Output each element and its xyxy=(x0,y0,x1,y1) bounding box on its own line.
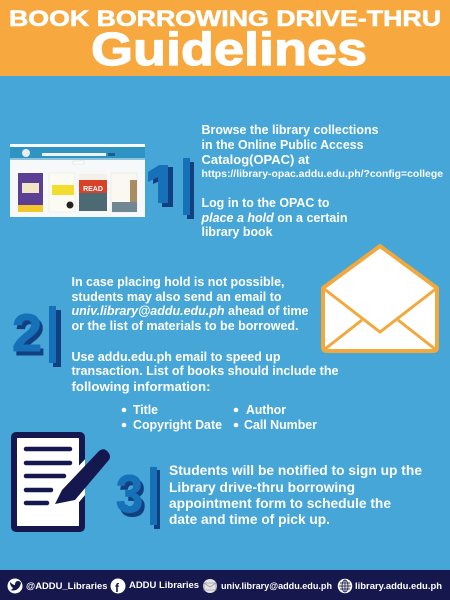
icon: facebook: f xyxy=(115,581,120,595)
step 2 text: univ.library@addu.edu.ph ahead of time xyxy=(72,304,309,318)
information list: Title xyxy=(133,403,158,417)
information list: Copyright Date xyxy=(133,418,222,432)
step 1 text: https://library-opac.addu.edu.ph/?config=college xyxy=(202,168,443,180)
icon: email xyxy=(203,579,217,593)
icon: globe xyxy=(338,580,352,592)
number 1 with bars xyxy=(148,158,194,219)
number 3 with bars: 3 xyxy=(116,465,143,524)
number 2 with bars: 2 xyxy=(12,304,42,363)
number 2 with bars xyxy=(12,304,61,367)
footer: website: library.addu.edu.ph xyxy=(355,581,442,591)
OPAC website screenshot xyxy=(10,144,145,217)
footer: email address: univ.library@addu.edu.ph xyxy=(221,581,332,591)
step 2 text xyxy=(72,275,339,394)
step 1 text xyxy=(200,123,443,239)
screenshot book title: READ xyxy=(83,186,103,193)
step 1 text: Catalog(OPAC) at xyxy=(202,153,310,167)
step 3 text: appointment form to schedule the xyxy=(169,496,391,511)
title: book borrowing drive-thru: BOOK BORROWING DRIVE-THRU xyxy=(9,6,441,31)
footer: facebook page: ADDU Libraries xyxy=(129,580,199,590)
step 3 text: date and time of pick up. xyxy=(169,512,330,527)
step 3 text xyxy=(169,463,422,527)
icon: twitter xyxy=(8,578,22,594)
step 1 text: Log in to the OPAC to xyxy=(202,196,330,210)
step 1 text: in the Online Public Access xyxy=(202,138,364,152)
step 2 text: In case placing hold is not possible, xyxy=(72,275,284,289)
step 3 text: Library drive-thru borrowing xyxy=(169,480,355,495)
step 2 text: Use addu.edu.ph email to speed up xyxy=(72,350,281,364)
panel: step 1 xyxy=(10,123,443,239)
information list: Author xyxy=(246,403,286,417)
title: guidelines: Guidelines xyxy=(91,23,367,75)
number 3 with bars xyxy=(116,465,160,529)
step 1 text: library book xyxy=(202,225,273,239)
information list: Call Number xyxy=(244,418,317,432)
step 1 text: Browse the library collections xyxy=(202,123,379,137)
header banner xyxy=(0,0,450,76)
step 2 text: transaction. List of books should include the xyxy=(72,364,339,378)
panel: step 3 xyxy=(14,435,422,529)
number 2 with bars: 2 xyxy=(15,308,45,367)
icon: facebook xyxy=(110,578,126,595)
step 3 text: Students will be notified to sign up the xyxy=(169,463,422,478)
icon: open envelope xyxy=(323,246,437,351)
footer bar xyxy=(0,570,450,600)
footer: twitter handle: @ADDU_Libraries xyxy=(26,581,108,591)
number 3 with bars: 3 xyxy=(119,469,146,528)
step 2 text: or the list of materials to be borrowed. xyxy=(72,319,298,333)
icon: document and pen xyxy=(14,435,110,529)
information list xyxy=(122,403,317,432)
step 2 text: following information: xyxy=(72,380,210,394)
panel: step 2 xyxy=(12,246,437,432)
step 1 text: place a hold on a certain xyxy=(200,211,348,225)
step 2 text: students may also send an email to xyxy=(72,290,282,304)
